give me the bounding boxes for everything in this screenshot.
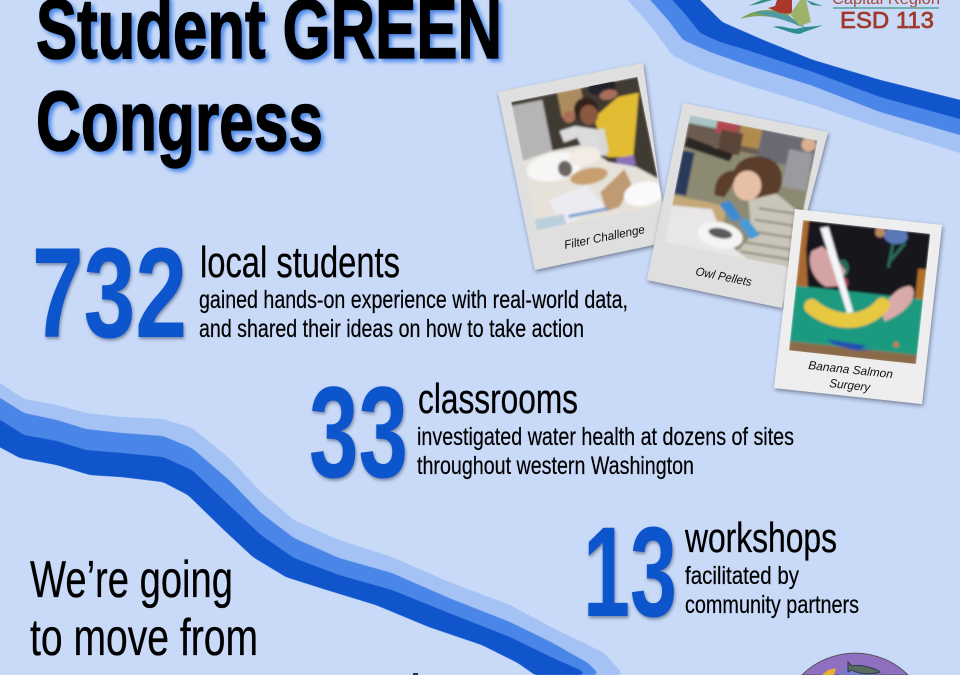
logo: Capital Region ESD 113: ESD 113	[840, 7, 934, 33]
river: top right	[622, 0, 960, 155]
polaroid: Owl Pellets: Owl Pellets	[694, 264, 753, 289]
stat: 33 classrooms: throughout western Washington	[417, 452, 694, 480]
polaroid: Filter Challenge	[498, 63, 667, 270]
closing statement: We’re going	[30, 551, 233, 609]
stat: 732 local students: local students	[200, 238, 400, 287]
polaroid: Filter Challenge: Filter Challenge	[563, 222, 646, 252]
river: bottom left	[0, 379, 624, 675]
stat: 732 local students: gained hands-on experience with real-world data,	[199, 286, 628, 314]
stat: 732 local students: 732	[32, 222, 187, 365]
stat: 732 local students: and shared their ideas on how to take action	[199, 315, 584, 343]
stat: 13 workshops	[583, 501, 859, 644]
stat: 33 classrooms: classrooms	[418, 375, 578, 422]
polaroid: Owl Pellets	[647, 103, 828, 308]
polaroid: Banana Salmon Surgery: Banana Salmon	[808, 358, 894, 381]
stat: 13 workshops: community partners	[685, 591, 859, 619]
polaroid: Banana Salmon Surgery: Surgery	[829, 376, 872, 395]
stat: 732 local students	[32, 222, 628, 365]
polaroid: Banana Salmon Surgery	[774, 209, 942, 404]
stat: 33 classrooms: investigated water health at dozens of sites	[417, 423, 794, 451]
badge: fish emblem	[802, 653, 908, 675]
closing statement: to move from	[30, 609, 258, 667]
stat: 13 workshops: 13	[583, 501, 677, 644]
title	[36, 0, 502, 168]
stat: 13 workshops: facilitated by	[685, 562, 799, 590]
closing statement	[30, 551, 418, 675]
title: Congress	[36, 74, 323, 168]
stat: 33 classrooms: 33	[309, 359, 408, 505]
logo: Capital Region ESD 113	[740, 0, 940, 34]
stat: 33 classrooms	[309, 359, 794, 505]
stat: 13 workshops: workshops	[684, 514, 837, 561]
